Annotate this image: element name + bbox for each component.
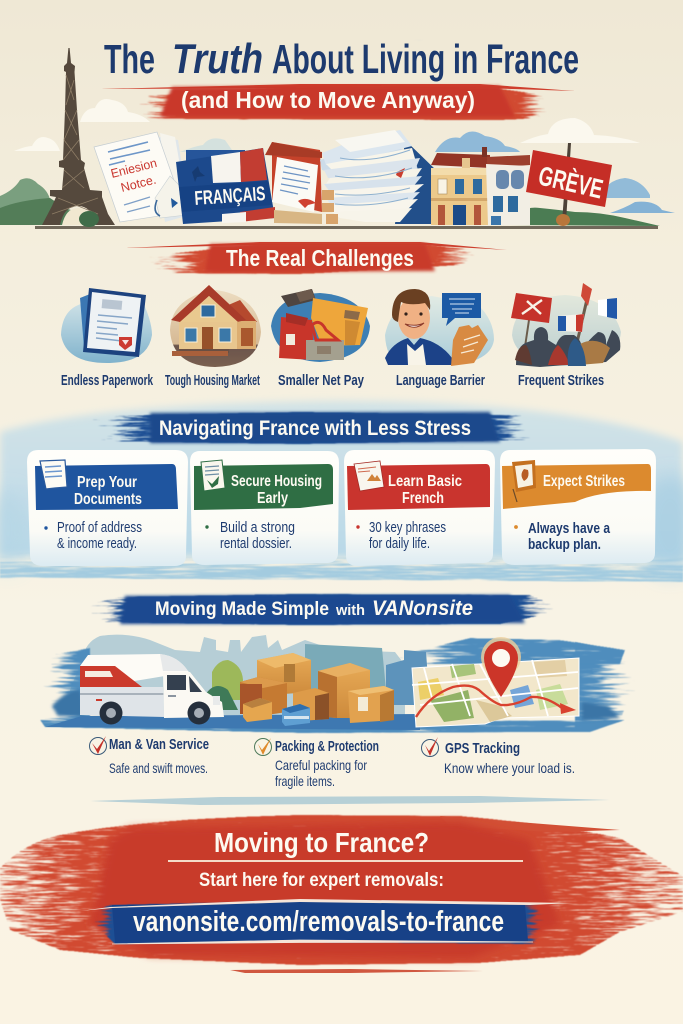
challenge labels: Endless Paperwork <box>61 373 154 389</box>
card: expect strikes: Always have a <box>528 520 611 537</box>
card: expect strikes <box>500 449 656 565</box>
panel: the real challenges icons <box>61 283 621 367</box>
icon: Grève strike sign <box>526 143 612 226</box>
icon: smaller net pay <box>271 289 370 362</box>
trees <box>0 178 660 226</box>
icon: route map <box>412 637 579 727</box>
url banner: vanonsite.com/removals-to-france <box>133 906 504 938</box>
service: man and van <box>90 736 209 776</box>
card: prep your documents: Proof of address <box>57 519 142 536</box>
subtitle banner <box>100 84 575 120</box>
icon: notice papers: Eniesion <box>109 156 158 181</box>
clouds <box>14 99 675 213</box>
service: packing and protection: Careful packing for <box>275 757 367 773</box>
divider brush <box>90 796 610 805</box>
card: prep your documents: Prep Your <box>77 474 137 491</box>
card: prep your documents <box>27 450 188 566</box>
url banner <box>80 899 573 944</box>
section heading: Navigating France with Less Stress <box>80 412 545 444</box>
icon: red book and form <box>265 142 322 224</box>
service: man and van: Safe and swift moves. <box>109 760 208 776</box>
card: prep your documents: Documents <box>74 491 142 508</box>
challenge labels: Smaller Net Pay <box>278 373 364 389</box>
panel: stress tips cards <box>27 449 656 566</box>
moving illustration: van, boxes and map <box>28 635 652 733</box>
challenge labels: Language Barrier <box>396 373 485 389</box>
card: secure housing early: Secure Housing <box>231 473 322 490</box>
icon: Eiffel Tower <box>42 48 115 227</box>
ground line <box>35 226 658 229</box>
card: learn basic French: French <box>402 490 444 507</box>
section heading: The Real Challenges: The Real Challenges <box>226 245 414 271</box>
service: GPS tracking: Know where your load is. <box>444 760 575 776</box>
section heading: Moving Made Simple with VANonsite: with <box>335 602 365 619</box>
card: expect strikes: backup plan. <box>528 536 601 553</box>
challenge labels <box>61 373 604 389</box>
icon: stack of papers <box>320 130 438 224</box>
icon: Français book <box>176 148 275 224</box>
challenge labels: Frequent Strikes <box>518 373 604 389</box>
icon: notice papers: Notce. <box>119 173 158 195</box>
card: learn basic French: 30 key phrases <box>369 519 446 536</box>
blue brush washes <box>28 638 652 733</box>
icon: language barrier <box>385 289 494 366</box>
section heading: The Real Challenges <box>125 242 507 274</box>
subheadline: Start here for expert removals: <box>199 869 444 891</box>
title <box>104 35 579 82</box>
card: learn basic French: for daily life. <box>369 535 430 552</box>
call to action panel <box>0 815 683 973</box>
icon: tough housing market <box>170 285 261 367</box>
subtitle banner: (and How to Move Anyway) <box>181 87 475 113</box>
icon: French townhouses <box>431 147 530 225</box>
section heading: Moving Made Simple with VANonsite: Moving Made Simple <box>155 599 329 620</box>
service: packing and protection <box>254 738 379 789</box>
skyline <box>70 635 405 715</box>
service: GPS tracking: GPS Tracking <box>445 740 520 757</box>
hero illustration: paperwork, books, buildings and strike sign <box>0 48 675 229</box>
icon: notice papers <box>94 132 190 222</box>
title: The <box>104 36 155 82</box>
card: expect strikes: Expect Strikes <box>543 473 625 490</box>
service: packing and protection: fragile items. <box>275 773 335 789</box>
challenge labels: Tough Housing Market <box>165 373 260 389</box>
card: secure housing early: rental dossier. <box>220 535 292 552</box>
card: prep your documents: & income ready. <box>57 535 137 552</box>
headline: Moving to France? <box>214 827 429 858</box>
card: learn basic French: Learn Basic <box>388 473 462 490</box>
card: learn basic French <box>344 450 495 566</box>
tree <box>212 660 243 700</box>
title: Truth <box>172 35 263 82</box>
panel: blue wash background <box>0 401 683 582</box>
icon: endless paperwork <box>61 288 152 363</box>
service: packing and protection: Packing & Protection <box>275 738 379 755</box>
card: secure housing early <box>190 451 339 565</box>
section heading: Navigating France with Less Stress: Navigating France with Less Stress <box>159 417 471 440</box>
section heading: Moving Made Simple with VANonsite: VANonsite <box>372 597 473 620</box>
service: man and van: Man & Van Service <box>109 736 209 753</box>
card: secure housing early: Early <box>257 490 288 507</box>
section heading: Moving Made Simple with VANonsite <box>80 594 566 625</box>
icon: removal van <box>80 654 224 724</box>
icon: Français book: FRANÇAIS <box>194 183 266 210</box>
icon: stacked boxes <box>240 653 394 726</box>
icon: frequent strikes <box>511 283 621 367</box>
icon: Grève strike sign: GRÈVE <box>536 160 606 204</box>
brush background <box>0 815 683 965</box>
card: secure housing early: Build a strong <box>220 519 295 536</box>
service: GPS tracking <box>422 737 575 776</box>
